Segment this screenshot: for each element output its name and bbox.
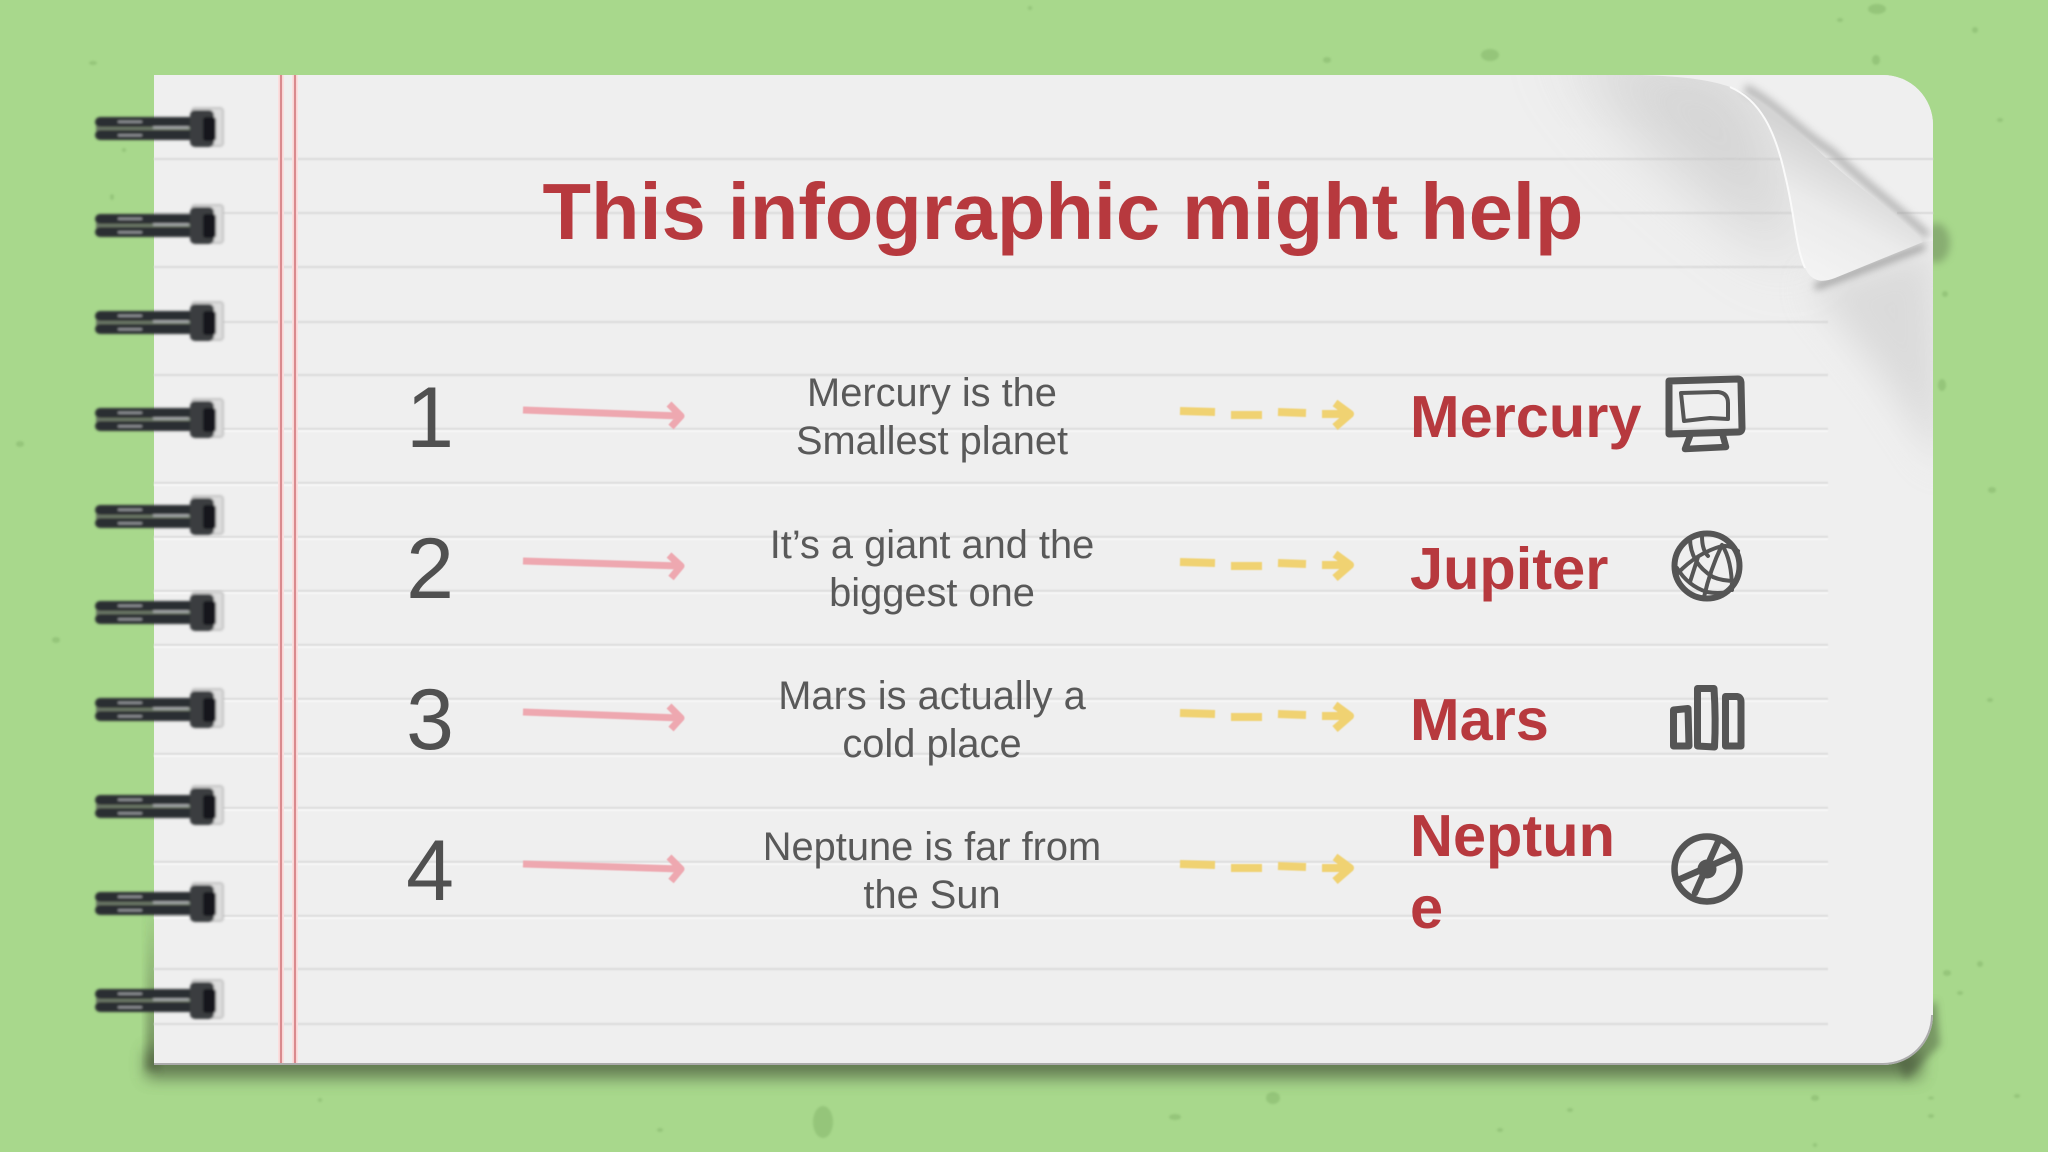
- description: Smallest planet: [796, 419, 1068, 463]
- yellow dashed arrow: [1180, 403, 1350, 427]
- description: the Sun: [863, 873, 1001, 917]
- pink arrow: [523, 404, 681, 427]
- pink arrow: [523, 857, 681, 881]
- shade under flap: [1815, 246, 1925, 287]
- description: [796, 371, 1068, 463]
- title: This infographic might help: [543, 167, 1583, 256]
- curled flap: [1758, 107, 1922, 281]
- ruled lines: [154, 159, 1933, 1024]
- description: biggest one: [829, 571, 1035, 615]
- icon: monitor: [1669, 379, 1742, 449]
- planet name: Mars: [1410, 686, 1549, 753]
- paper sheet: [154, 75, 1933, 1065]
- icon: bar chart: [1674, 688, 1741, 747]
- yellow dashed arrow: [1180, 705, 1350, 729]
- spiral binding: [95, 108, 223, 1019]
- panel: notebook page: [154, 40, 1945, 1065]
- page curl: [1577, 75, 1933, 436]
- description: [763, 825, 1101, 917]
- description: cold place: [842, 722, 1022, 766]
- row 2: Jupiter: [406, 521, 1740, 617]
- yellow dashed arrow: [1180, 554, 1350, 578]
- number 2: 2: [406, 521, 454, 617]
- number 4: 4: [406, 823, 454, 919]
- number 3: 3: [406, 672, 454, 768]
- planet name (wrapped): Neptun: [1410, 802, 1615, 869]
- description: It’s a giant and the: [770, 523, 1094, 567]
- description: Neptune is far from: [763, 825, 1101, 869]
- number 1: 1: [406, 370, 454, 466]
- description: [770, 523, 1094, 615]
- pink arrow: [523, 706, 681, 729]
- curl shadow below tip: [1822, 254, 1933, 436]
- row 3: Mars: [406, 672, 1741, 768]
- flat corner restored above the fold: [1645, 75, 1933, 214]
- paper drop shadow: [146, 223, 1950, 1080]
- description: Mercury is the: [807, 371, 1057, 415]
- icon: disc: [1674, 836, 1740, 902]
- pink arrow: [523, 555, 681, 578]
- row 4: Neptune: [406, 802, 1740, 941]
- planet name (wrapped): e: [1410, 874, 1443, 941]
- paper edge: [154, 1015, 1932, 1064]
- planet name: Jupiter: [1410, 535, 1608, 602]
- margin lines: [281, 75, 295, 1065]
- icon: globe: [1674, 534, 1740, 598]
- description: [778, 674, 1087, 766]
- row 1: Mercury: [406, 370, 1742, 466]
- curl shadow left of fold: [1577, 75, 1796, 250]
- planet name: Mercury: [1410, 383, 1642, 450]
- planet name (wrapped): [1410, 802, 1615, 941]
- shade along upper fold edge: [1745, 88, 1928, 236]
- description: Mars is actually a: [778, 674, 1087, 718]
- yellow dashed arrow: [1180, 857, 1350, 881]
